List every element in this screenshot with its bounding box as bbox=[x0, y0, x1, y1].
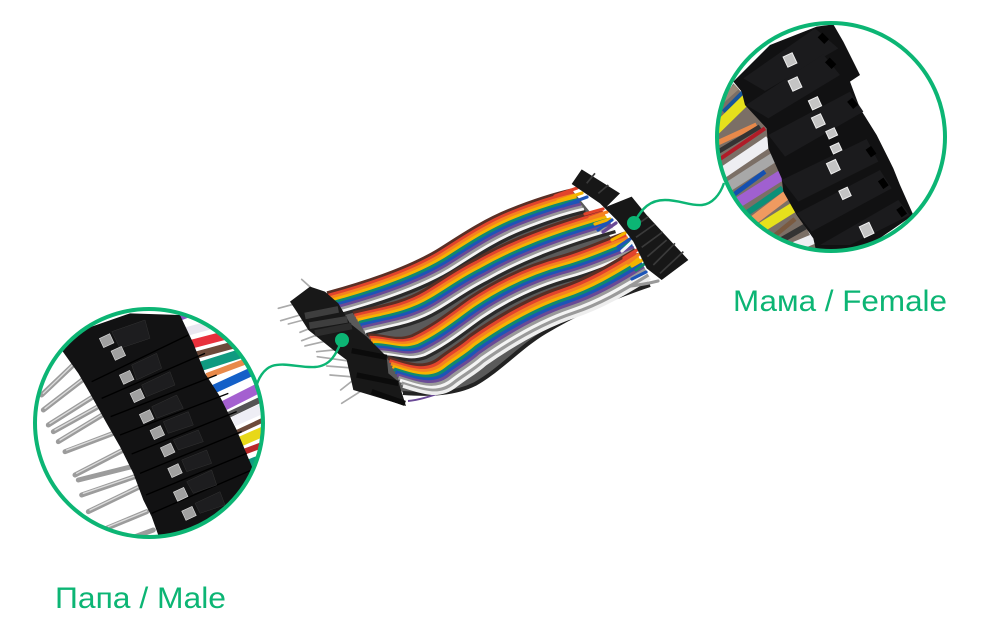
wire group 1 bbox=[327, 190, 586, 315]
latch windows bbox=[112, 320, 225, 513]
label: male: Папа / Male bbox=[55, 582, 226, 615]
lighter housings at top bbox=[305, 309, 352, 333]
socket openings bbox=[818, 33, 907, 217]
silver contacts bbox=[99, 334, 196, 520]
bottom edge of ribbon bbox=[403, 285, 650, 401]
male close-up photo bbox=[33, 308, 267, 540]
leader line: female bbox=[627, 183, 724, 230]
pins bbox=[42, 363, 153, 537]
silver contacts bbox=[783, 53, 874, 238]
pin highlights bbox=[43, 363, 147, 527]
housings at bottom bbox=[352, 351, 405, 403]
leader line: male bbox=[256, 333, 349, 388]
male connectors and pins bbox=[278, 279, 406, 406]
black housings bbox=[733, 24, 913, 253]
ribbon backing bbox=[327, 190, 650, 394]
coloured wires, male side bbox=[180, 313, 267, 464]
female circle outline bbox=[717, 23, 945, 251]
wires fanning into the female end bbox=[555, 188, 658, 286]
wire group 4 bbox=[388, 250, 650, 393]
female close-up photo bbox=[719, 25, 913, 249]
wire backdrop bbox=[713, 83, 817, 248]
coloured wires, female side bbox=[715, 87, 817, 247]
panel: male connector close-up bbox=[33, 308, 267, 540]
female connector mass bbox=[572, 169, 688, 280]
male pins bbox=[278, 279, 370, 403]
panel: female connector close-up bbox=[713, 22, 947, 254]
female connector bodies bbox=[587, 173, 683, 273]
wire group 3 bbox=[368, 233, 638, 360]
female connectors bbox=[572, 169, 688, 280]
housing faces bbox=[743, 28, 910, 245]
black housings bbox=[62, 313, 253, 540]
wire group 2 bbox=[353, 210, 616, 335]
central ribbon cable bundle bbox=[278, 169, 688, 406]
male circle outline bbox=[35, 309, 263, 537]
male connector mass bbox=[290, 287, 406, 406]
label: female: Мама / Female bbox=[733, 285, 947, 318]
housing seams bbox=[92, 335, 252, 513]
